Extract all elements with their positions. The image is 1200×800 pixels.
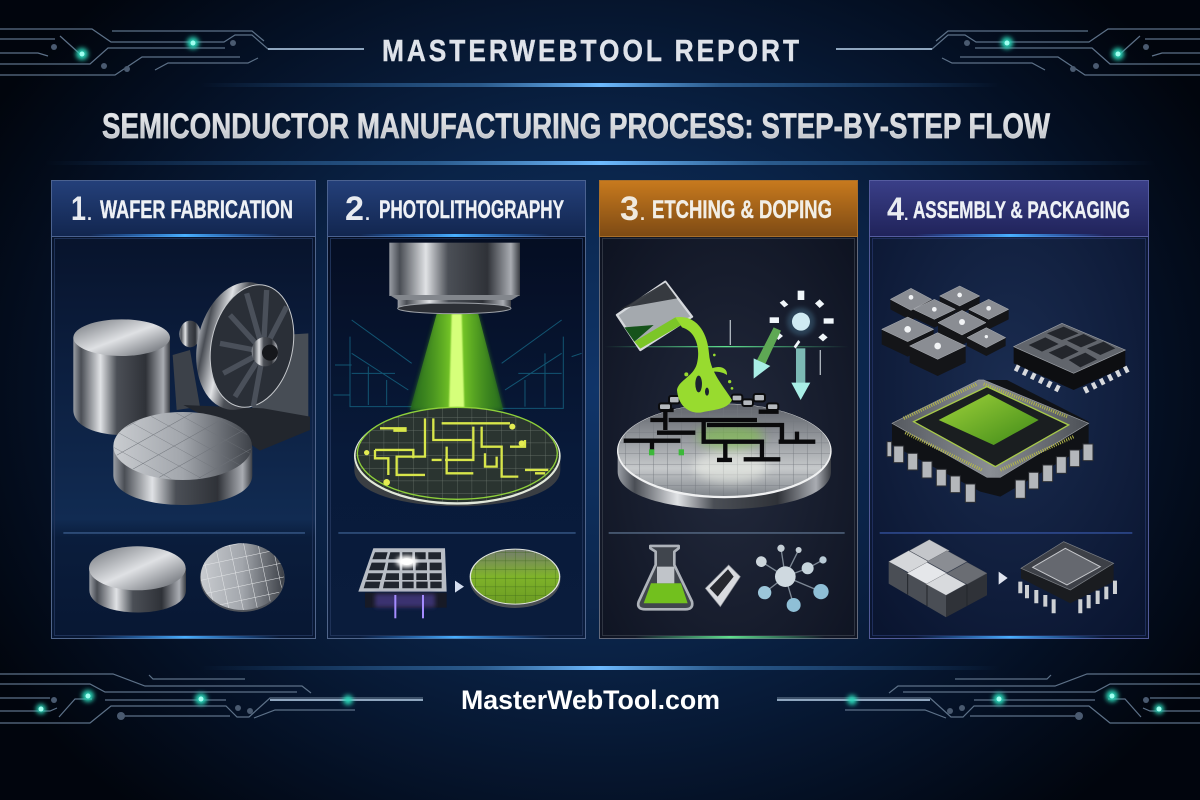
- icon: beaker pouring: [617, 282, 692, 350]
- icon: green wafer: [470, 549, 560, 608]
- icon: chip sample: [705, 565, 740, 607]
- icon: exposed wafer: [354, 407, 561, 506]
- icon: light beam: [410, 314, 503, 410]
- header label: MASTERWEBTOOL REPORT: [382, 33, 802, 68]
- bottom streak: [200, 666, 1000, 670]
- icon: etched wafer: [617, 394, 832, 509]
- heading: step 2: 2: [345, 190, 364, 228]
- icon: packaged chip: [1020, 542, 1115, 613]
- icon: flask: [638, 546, 692, 609]
- heading: step 2: .: [365, 204, 370, 224]
- icon: small chip: [1014, 323, 1129, 391]
- icon: polished disc: [89, 546, 186, 612]
- icon: slicing machine: [173, 274, 310, 451]
- icon: separated dies: [882, 286, 1009, 376]
- heading: step 1: WAFER FABRICATION: [100, 196, 293, 224]
- bottom left circuit decoration: [0, 674, 423, 723]
- icon: doping source: [770, 291, 834, 349]
- heading: step 4: 4: [887, 191, 904, 227]
- panel: wafer fabrication: [52, 180, 316, 638]
- heading: step 1: [52, 180, 316, 237]
- heading: step 1: 1: [71, 190, 86, 228]
- icon: silicon ingot: [73, 319, 170, 435]
- icon: lens column: [389, 243, 520, 314]
- panel: assembly and packaging: [870, 180, 1148, 638]
- arrow: [999, 572, 1008, 585]
- icon: large wafer: [113, 412, 252, 505]
- heading: step 4: .: [904, 207, 908, 224]
- icon: patterned wafer: [200, 543, 285, 612]
- heading: step 2: PHOTOLITHOGRAPHY: [379, 196, 564, 224]
- heading: step 3: 3: [620, 190, 639, 228]
- panel: photolithography: [328, 180, 586, 638]
- icon: die blocks: [889, 540, 987, 617]
- arrows: dopant direction: [754, 327, 810, 400]
- arrow: [455, 581, 464, 593]
- heading: step 3: ETCHING & DOPING: [652, 196, 832, 224]
- horizon line: [604, 346, 849, 347]
- footer website: MasterWebTool.com: [461, 685, 720, 715]
- heading: step 2: [328, 180, 586, 237]
- heading: step 3: [600, 180, 858, 236]
- grid backdrop: [333, 320, 582, 408]
- top right circuit decoration: [836, 29, 1200, 75]
- heading: step 1: .: [87, 204, 92, 224]
- bottom right circuit decoration: [777, 674, 1200, 723]
- icon: green liquid: [675, 317, 733, 413]
- top left circuit decoration: [0, 29, 364, 75]
- panel: etching and doping: [600, 180, 858, 638]
- icon: main processor: [887, 380, 1093, 502]
- icon: molecule: [756, 545, 829, 612]
- icon: photomask: [358, 548, 447, 618]
- heading: step 3: .: [640, 204, 645, 224]
- heading: step 4: [870, 180, 1148, 237]
